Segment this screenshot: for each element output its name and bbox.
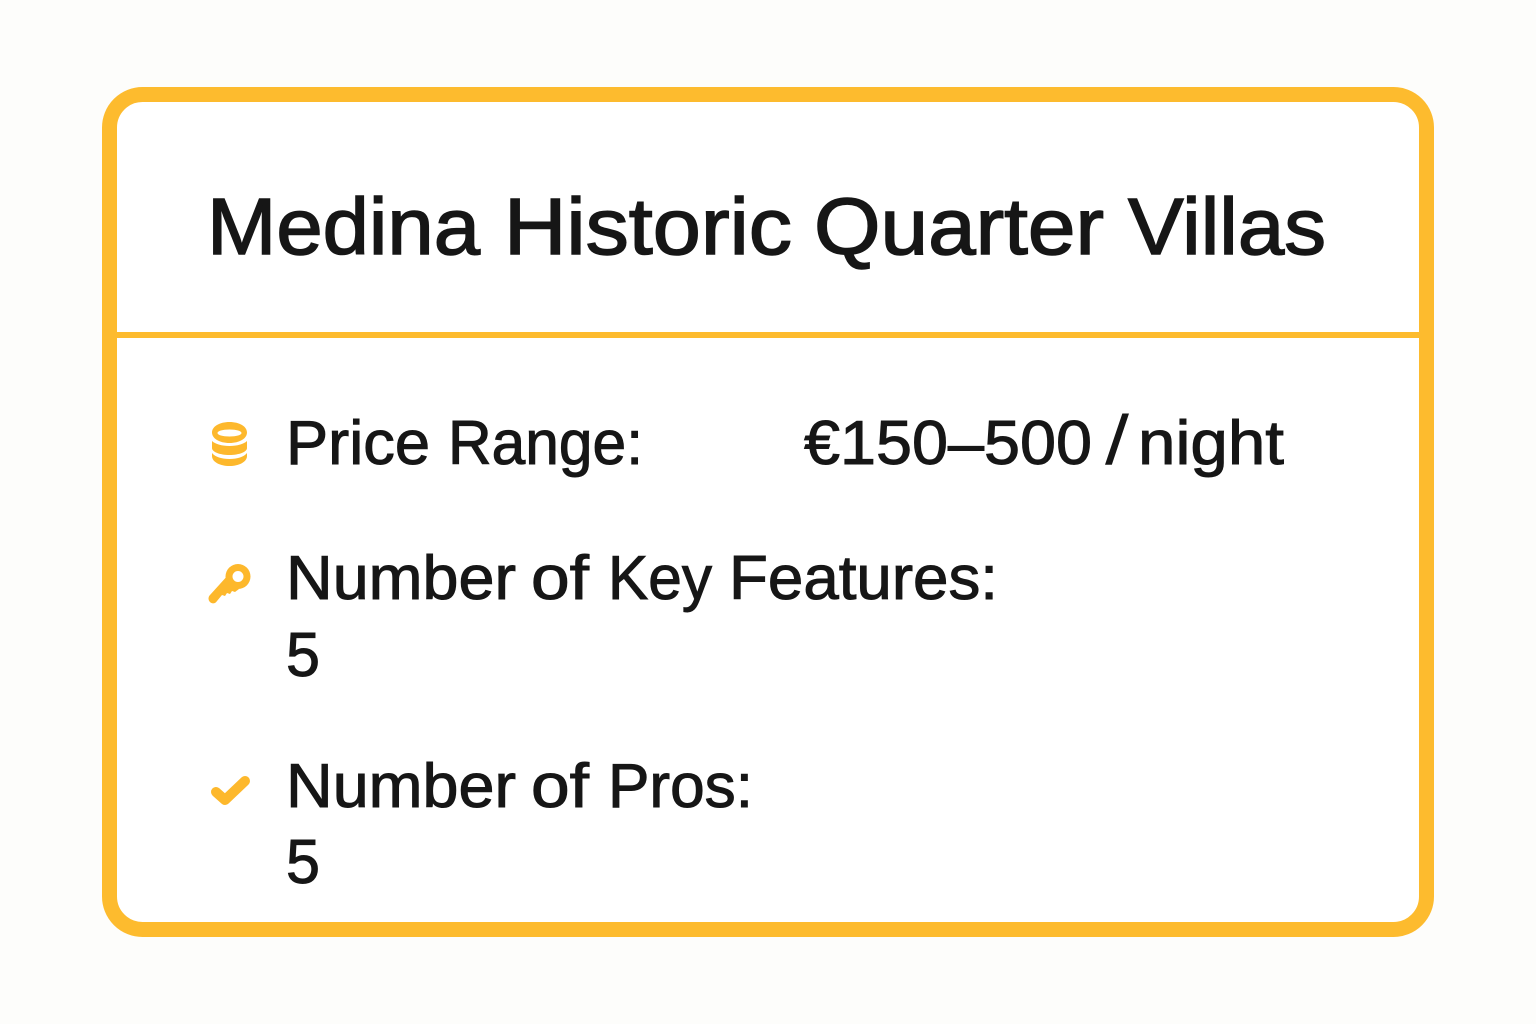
key features label bbox=[286, 544, 998, 613]
key features label: Key bbox=[608, 544, 712, 613]
panel: villa card bbox=[110, 94, 1426, 930]
title: Quarter bbox=[814, 182, 1104, 271]
key features label: Number bbox=[286, 544, 516, 613]
key features label: Features: bbox=[729, 544, 998, 613]
price range value: night bbox=[1138, 409, 1284, 478]
price range value: €150–500 bbox=[804, 409, 1092, 478]
title: Historic bbox=[504, 182, 792, 271]
key features row bbox=[286, 544, 998, 690]
pros label: of bbox=[531, 752, 590, 821]
title bbox=[207, 182, 1326, 271]
icon: key bbox=[208, 564, 250, 603]
pros value: 5 bbox=[286, 828, 320, 897]
price range label: Range: bbox=[448, 409, 643, 478]
price range label bbox=[286, 409, 643, 478]
title: Medina bbox=[207, 182, 481, 271]
key features label: of bbox=[531, 544, 590, 613]
pros label: Pros: bbox=[608, 752, 753, 821]
pros row bbox=[286, 752, 753, 897]
price range row bbox=[286, 401, 1284, 479]
icon: check mark bbox=[216, 781, 245, 800]
pros label: Number bbox=[286, 752, 516, 821]
price range value: / bbox=[1105, 401, 1130, 479]
title: Villas bbox=[1128, 182, 1326, 271]
key features value: 5 bbox=[286, 621, 320, 690]
price range value bbox=[804, 401, 1284, 479]
icon: coins bbox=[212, 422, 247, 466]
pros label bbox=[286, 752, 753, 821]
price range label: Price bbox=[286, 409, 430, 478]
